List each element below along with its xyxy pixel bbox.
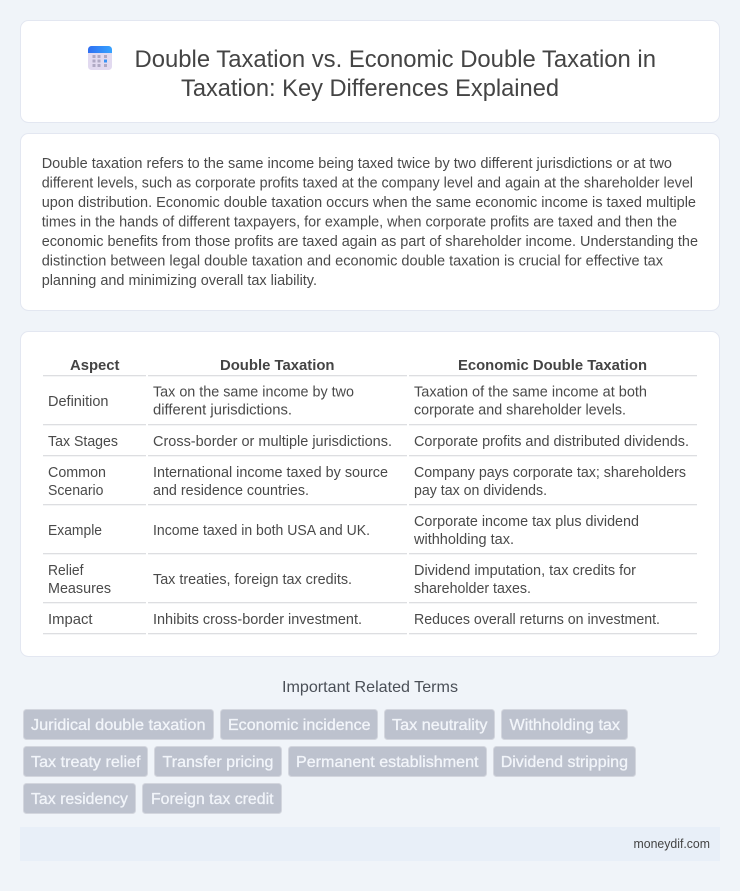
table row: example: withholding tax. (413, 532, 514, 548)
table row: tax stages: Cross-border or multiple jurisdictions. (153, 434, 392, 450)
table row: relief measures (48, 563, 636, 597)
table row: tax stages (48, 434, 689, 450)
tag: tax neutrality (384, 710, 494, 740)
tag: economic incidence (220, 710, 378, 740)
heading: important related terms: Important Related Terms (282, 679, 458, 696)
table row: relief measures: shareholder taxes. (414, 581, 531, 597)
table row: impact (48, 612, 660, 628)
title (134, 46, 656, 102)
tag: transfer pricing (154, 746, 282, 776)
table row: example (48, 514, 639, 548)
table row: definition (48, 385, 647, 419)
tag: foreign tax credit (142, 784, 282, 814)
tag: dividend stripping: Dividend stripping (501, 754, 628, 771)
table header row: Economic Double Taxation (458, 357, 647, 374)
table row: example: Income taxed in both USA and UK. (153, 523, 370, 539)
table row: impact: Inhibits cross-border investment. (153, 612, 362, 628)
table header row: Double Taxation (220, 357, 334, 374)
table row: definition: Taxation of the same income at both (414, 385, 647, 401)
tag: permanent establishment (288, 746, 486, 776)
table row: relief measures: Dividend imputation, tax credits for (414, 563, 636, 579)
table row: common scenario: Common (48, 465, 106, 481)
table row: common scenario: and residence countries. (153, 483, 309, 499)
tag: tax residency: Tax residency (31, 791, 128, 808)
tag: economic incidence: Economic incidence (228, 717, 371, 734)
icon: calendar (88, 46, 112, 70)
table row: relief measures: Tax treaties, foreign tax credits. (153, 572, 352, 588)
footer bar (20, 827, 720, 861)
tag: dividend stripping (494, 746, 636, 776)
tag: tax treaty relief (24, 746, 148, 776)
table row: definition: Definition (48, 394, 108, 410)
table row: tax stages: Tax Stages (48, 434, 118, 450)
footer bar: moneydif.com (634, 836, 710, 851)
table row: common scenario: Scenario (48, 483, 104, 499)
panel: summary paragraph: planning and minimizing overall tax liability. (42, 273, 317, 289)
tag: foreign tax credit: Foreign tax credit (151, 791, 274, 808)
tag: permanent establishment: Permanent establishment (296, 754, 479, 771)
title: Double Taxation vs. Economic Double Taxation in (134, 46, 656, 73)
tag: juridical double taxation: Juridical double taxation (31, 717, 206, 734)
table row: impact: Impact (48, 612, 92, 628)
table row: tax stages: Corporate profits and distributed dividends. (414, 434, 689, 450)
table row: relief measures: Measures (48, 581, 111, 597)
related term tags (24, 710, 636, 814)
panel: summary paragraph: Double taxation refers to the same income being taxed twice by two different jurisdictions or at two (42, 156, 672, 172)
title: Taxation: Key Differences Explained (181, 75, 559, 102)
tag: tax residency (24, 784, 136, 814)
tag: withholding tax: Withholding tax (510, 717, 620, 734)
table header row: Aspect (70, 357, 120, 374)
panel: title header (20, 20, 720, 122)
panel: summary paragraph: times in the hands of different taxpayers, for example, when corporate profits are taxed and then the (42, 214, 677, 230)
table row: common scenario: Company pays corporate tax; shareholders (414, 465, 686, 481)
table row: definition: corporate and shareholder levels. (414, 403, 626, 419)
tag: transfer pricing: Transfer pricing (162, 754, 274, 771)
panel: summary paragraph: distinction between legal double taxation and economic double taxation is crucial for effective tax (42, 254, 664, 270)
table row: relief measures: Relief (48, 563, 84, 579)
table row: common scenario (48, 465, 686, 499)
panel: comparison table (20, 332, 720, 656)
panel: summary paragraph: upon distribution. Economic double taxation occurs when the same economic income is taxed multiple (42, 195, 696, 211)
panel: summary paragraph (20, 134, 720, 310)
tag: juridical double taxation (24, 710, 214, 740)
tag: withholding tax (502, 710, 628, 740)
panel: summary paragraph: economic benefits from those profits are taxed again as part of shareholder income. Understanding the (42, 234, 698, 250)
table row: example: Corporate income tax plus dividend (414, 514, 639, 530)
table header row (70, 357, 647, 374)
tag: tax treaty relief: Tax treaty relief (31, 754, 141, 771)
table row: impact: Reduces overall returns on investment. (414, 612, 660, 628)
table row: common scenario: pay tax on dividends. (414, 483, 547, 499)
tag: tax neutrality: Tax neutrality (392, 717, 488, 734)
table row: definition: different jurisdictions. (153, 403, 292, 419)
table row: example: Example (48, 523, 102, 539)
panel: summary paragraph: different levels, such as corporate profits taxed at the company level and again at the shareholder level (42, 176, 693, 192)
table row: common scenario: International income taxed by source (153, 465, 388, 481)
table row: definition: Tax on the same income by two (153, 385, 354, 401)
